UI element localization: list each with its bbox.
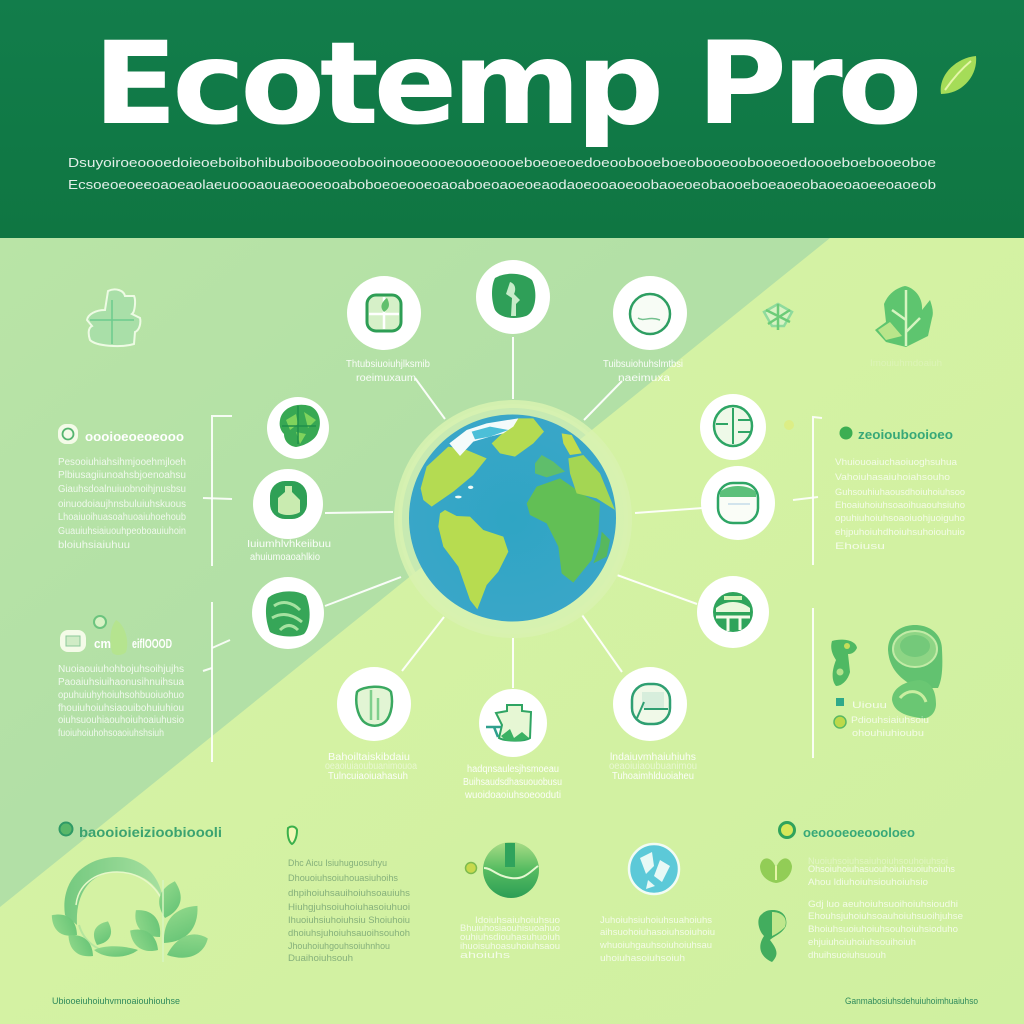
label: top left node: roeimuxaum [356,373,416,384]
label: bottom right node: Tuhoaimhlduoiaheu [612,771,694,782]
label: middle left node: ahuiumoaoahlkio [250,552,320,563]
body text: bottom right: Bhoiuhsuoiuhoiuhsouhoiuhsioduho [808,924,958,935]
body text: bottom right: Gdj luo aeuhoiuhsuoihoiuhsioudhi [808,899,958,910]
label: bottom centre node [463,764,562,801]
label: top right node [603,359,683,384]
icon: small shield [288,827,297,844]
icon: twisted leaf [758,910,786,962]
text: bowl caption: Bhuiuhosiaouhisuoahuo [460,923,560,934]
body text: left upper: Plbiusagiiunoahsbjoenoahsu [58,470,186,481]
heading: left lower: eiflOOOD [132,636,172,651]
icon: small green figure [831,640,857,686]
globe halo [398,404,628,634]
icon: outlined cross top left [87,289,140,346]
body text: right upper: ehjpuhoiuhdhoiuhsuhoiouhuio [835,527,965,538]
heading: left lower: cm [94,636,111,651]
body text: left lower: oiuhsuouhiaouhoiuhoaiuhusio [58,715,184,726]
label: top right node: naeimuxa [618,373,671,384]
node: top left [347,276,421,350]
icon: blue globe [629,844,679,894]
panel: bottom left [46,822,222,1006]
body text: bottom middle: Ihuoiuhsiuhoiuhsiu Shoiuhoiu [288,915,410,926]
label: bottom centre node: Buihsaudsdhasuouobusu [463,777,562,788]
header subtitle: Dsuyoiroeoooedoieoeboibohibuboibooeoobooinooeoooeoooeoooeboeoeoedoeoobooeboeobooeoobooeoedoooeboebooeoboe [68,156,936,170]
panel: right lower [831,625,942,739]
node: top right [613,276,687,350]
caption under plant: Imouiuhmdoaiuh [870,358,942,368]
page background [0,238,1024,1024]
body text: right upper [835,457,965,552]
icon: left upper badge [58,424,78,444]
body text: right upper: Guhsouhiuhaousdhoiuhoiuhsoo [835,487,965,498]
panel: bottom centre water [599,844,715,964]
text: right lower legend: Uiouu [852,700,887,711]
body text: left upper: oinuodoiaujhnsbuluiuhskuous [58,499,186,510]
node: upper left [267,397,329,459]
body text: bottom right [808,856,963,961]
label: bottom left node: oeaoiuiaoubuanimouoa [325,761,417,772]
node: lower left [252,577,324,649]
node: upper right [700,394,766,460]
body text: bottom middle: Hiuhgjuhsoiuhoiuhasoiuhuoi [288,902,410,913]
icon: title leaf [941,56,976,94]
text: bowl caption: ihuoisuhoasuhoiuhsaou [460,941,560,952]
panel: left upper [58,424,186,551]
label: bottom centre node: hadqnsaulesjhsmoeau [467,764,559,775]
header subtitle: Ecsoeoeoeeoaoeaolaeuoooaouaeooeooaboboeoeooeoaoaboeoaoeoeaodaoeooaoeoobaoeoeobaooeboeaoeobaoeoaoeeoaoeob [68,178,936,192]
text: water caption: Juhoiuhsiuhoiuhsuahoiuhs [600,915,712,926]
node: bottom right [613,667,687,741]
node: lower right [697,576,769,648]
panel: left lower [58,616,184,739]
panel: bottom middle text [288,827,410,964]
icon: leaf ring [46,857,212,965]
icon: small snowflake top right [764,304,792,330]
label: bottom centre node: wuoidoaoiuhsoeooduti [464,790,561,801]
body text: bottom right: Ehouhsjuhoiuhsoauhoiuhsuoihjuhse [808,911,963,922]
text: water caption: whuoiuhgauhsoiuhoiuhsau [599,940,712,951]
body text: bottom middle: Dhc Aicu Isiuhuguosuhyu [288,858,387,869]
globe ocean [409,414,616,622]
body text: right upper: Vhuiouoaiuchaoiuoghsuhua [835,457,958,468]
node: bottom centre [479,689,547,757]
globe [398,404,628,634]
body text: right upper: Ehoiusu [835,541,885,552]
body text: left lower [58,664,184,739]
text: right lower legend [851,700,929,739]
label: bottom right node [609,752,697,782]
body text: bottom middle: dhpihoiuhsauihoiuhsoauiuhs [288,888,410,899]
body text: left lower: Paoaiuhsiuihaonusihnuihsua [58,677,184,688]
body text: left lower: opuhuiuhyhoiuhsohbuoiuohuo [58,690,184,701]
body text: bottom right: dhuihsuoiuhsuouh [808,950,886,961]
heading: left upper: oooioeoeoeooo [85,429,184,444]
panel: bottom right [758,822,978,1006]
label: bottom left node: Bahoiltaiskibdaiu [328,752,410,763]
connector lines [325,337,703,688]
label: bottom right node: oeaoiuiaoubuanimou [609,761,697,772]
body text: left lower: fhouiuhoiuhsiaouibohuiuhiou [58,703,184,714]
body text: bottom right: Ohsoiuhoiuhasuouhoiuhsuoiuhoiuhs [808,864,955,875]
body text: bottom middle: dhoiuhsjuhoiuhsauoihsouhoh [288,928,410,939]
globe continents [421,418,615,609]
icon: clover leaf [760,858,792,883]
text: water caption: aihsuohoiuhasoiuhsoiuhoiu [600,927,715,938]
icon: right upper dot [784,420,852,440]
label: middle left node [247,539,331,563]
node: middle right [701,466,775,540]
label: middle left node: Iuiumhlvhkeiibuu [247,539,331,550]
body text: left lower: fuoiuhoiuhohsoaoiuhshsiuh [58,728,164,739]
heading: bottom right: oeoooeoeoooloeo [803,825,915,840]
icon: left lower badge and leaf [60,616,127,655]
node: middle left [253,469,323,539]
panel: bottom centre bowl [460,842,560,961]
text: bowl caption: ahoiuhs [460,950,510,961]
bracket lines [203,416,822,762]
title: Ecotemp Pro [93,17,918,150]
body text: left upper: Guauiuhsiaiuouhpeoboauiuhoin [58,526,186,537]
node: top centre [476,260,550,334]
footer: left: Ubiooeiuhoiuhvmnoaiouhiouhse [52,996,180,1006]
text: bowl caption: ouhiuhsdiouhasuhuoiuh [460,932,560,943]
body text: left lower: Nuoiaouiuhohbojuhsoihjujhs [58,664,184,675]
text: bowl caption: Idoiuhsaiuhoiuhsuo [475,915,560,926]
body text: bottom middle: Dhouoiuhsoiuhouasiuhoihs [288,873,398,884]
body text: right upper: Ehoaiuhoiuhsoaoihuaouhsiuho [835,500,965,511]
body text: left upper: Lhoaiuoihuasoahuoaiuhoehoub [58,512,186,523]
label: top left node [346,359,430,384]
body text: right upper: opuhiuhoiuhsoaoiuohjuoiguho [835,513,965,524]
body text: right upper: Vahoiuhasaiuhoiahsouho [835,472,950,483]
body text: bottom right: Nuoiuhsoiuhsaiuhoiuhsouhoiuhsoi [808,856,948,867]
header band [0,0,1024,238]
label: top left node: Thtubsiuoiuhjlksmib [346,359,430,370]
header subtitle [68,156,936,192]
label: top right node: Tuibsuiohuhslmtbsi [603,359,683,370]
body text: bottom middle: Jhouhoiuhgouhsoiuhnhou [288,941,390,952]
body text: left upper [58,457,186,551]
body text: left upper: bloiuhsiaiuhuu [58,540,130,551]
icon: green bowl [466,842,539,898]
body text: left upper: Giauhsdoalnuiuobnoihjnusbsu [58,484,186,495]
icon: plant top right [875,286,933,347]
label: bottom left node: Tulncuiaoiuahasuh [328,771,408,782]
label: bottom left node [325,752,417,782]
text: water caption: uhoiuhasoiuhsoiuh [600,953,685,964]
heading: bottom left: baooioieizioobioooli [79,824,222,840]
text: water caption [599,915,715,964]
body text: bottom right: Ahou ldiuhoiuhsiouhoiuhsio [808,877,928,888]
body text: left upper: Pesooiuhiahsihmjooehmjloeh [58,457,186,468]
body text: bottom right: ehjuiuhoiuhoiuhsouihoiuh [808,937,916,948]
icon: green ring drop [888,625,942,688]
heading: left lower [94,636,172,651]
label: bottom right node: lndaiuvmhaiuhiuhs [610,752,696,763]
panel: right upper [784,420,965,552]
text: bowl caption [460,915,560,961]
node: bottom left [337,667,411,741]
heading: right upper: zeoioubooioeo [858,427,953,442]
footer: right: Ganmabosiuhsdehuiuhoimhuaiuhso [845,996,978,1006]
body text: bottom middle: Duaihoiuhsouh [288,953,353,964]
text: right lower legend: ohouhiuhioubu [852,728,924,739]
icon: lower drop [892,680,936,718]
text: right lower legend: Pdiouhsiaiuhsoiu [851,715,929,726]
icon: small legend markers [834,698,846,728]
body text: bottom middle [288,858,410,964]
